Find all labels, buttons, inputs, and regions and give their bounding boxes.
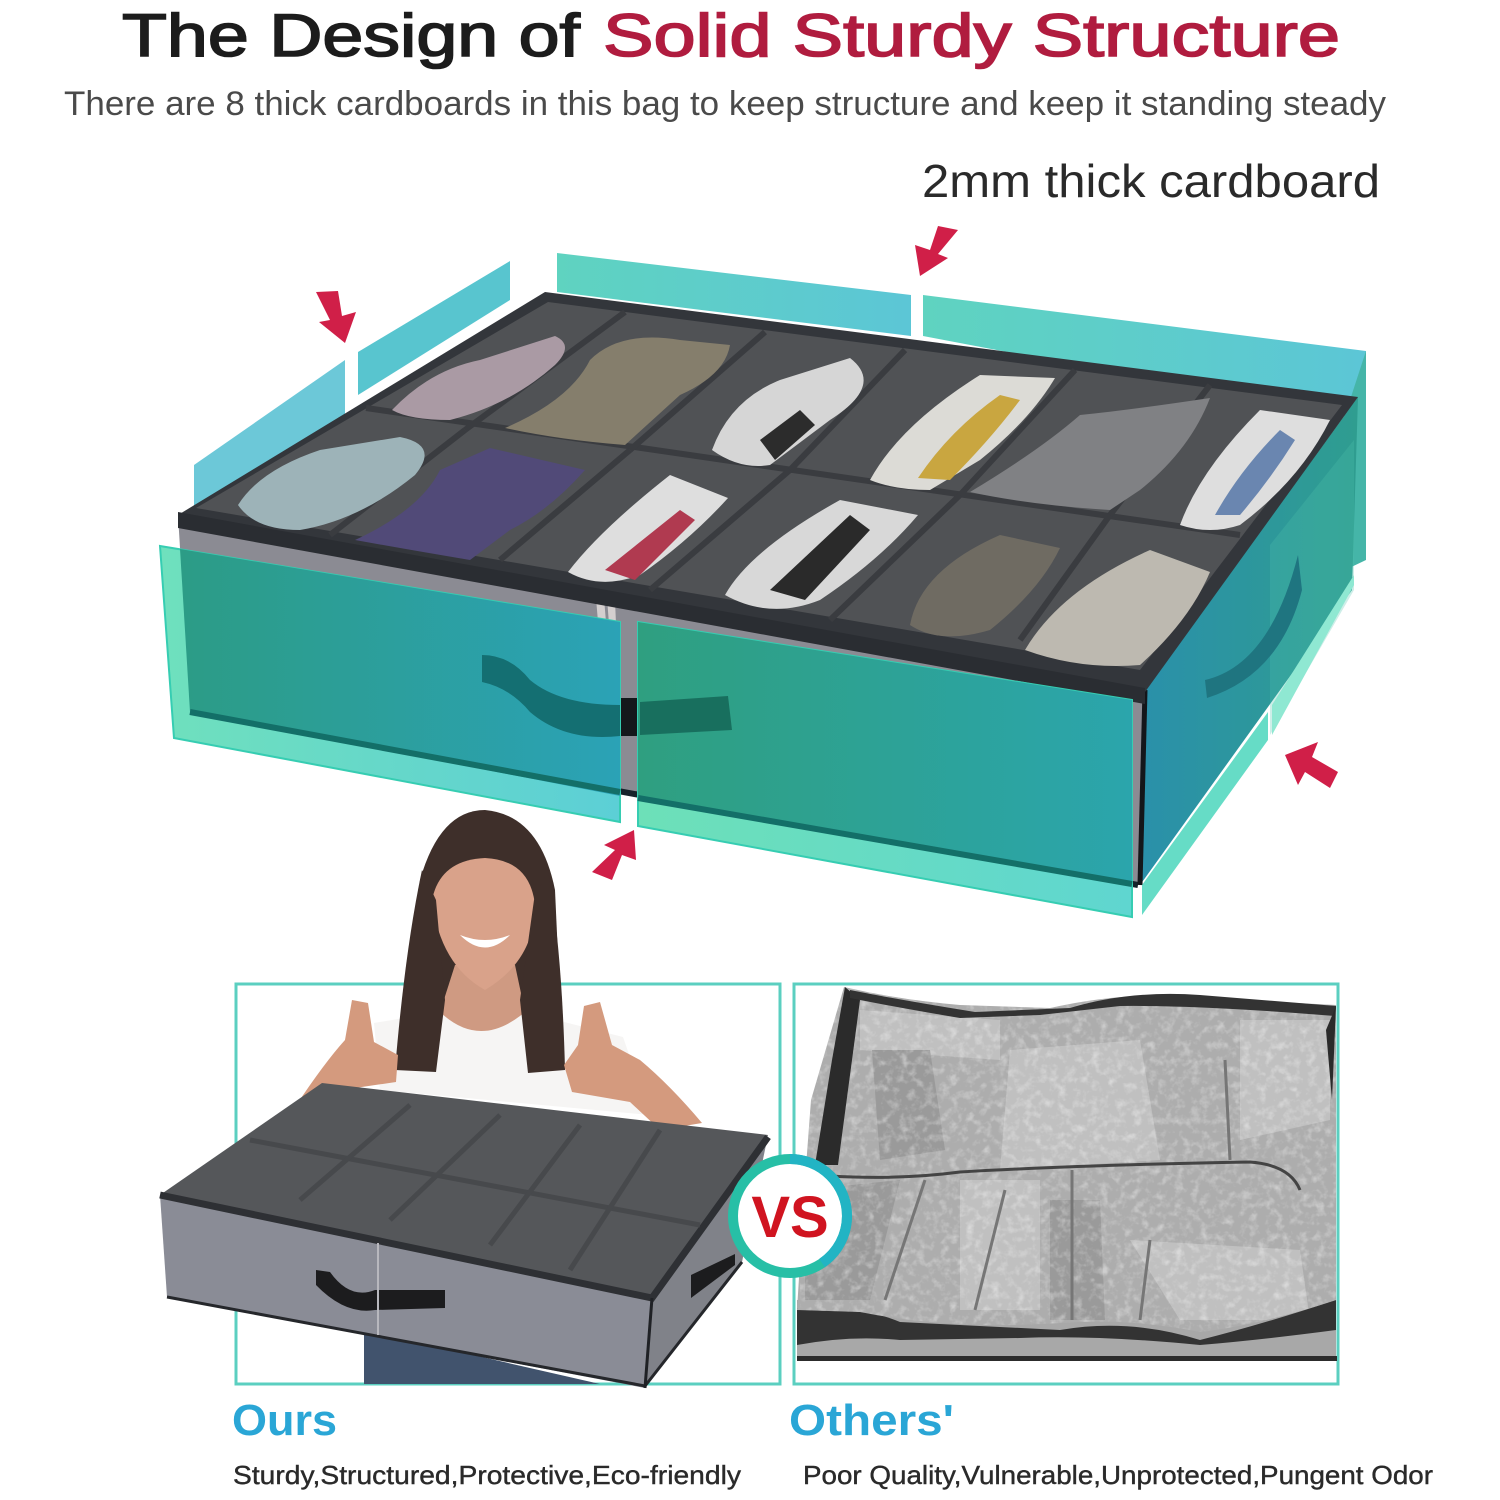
bag front: [178, 515, 1145, 885]
compartment dividers: [330, 312, 1240, 640]
neck: [440, 965, 525, 1031]
bag top window: [196, 302, 1342, 670]
right front panel over bag: [638, 622, 1132, 884]
subtitle: There are 8 thick cardboards in this bag to keep structure and keep it standing steady: [64, 85, 1386, 123]
small bag closed: [160, 1083, 768, 1388]
side panel lower strip: [1272, 575, 1354, 735]
smile: [460, 935, 510, 948]
VS badge: [733, 1159, 847, 1273]
front cardboard panels: [160, 440, 1354, 917]
cardboard label: 2mm thick cardboard: [922, 155, 1380, 207]
speckle: [800, 987, 1336, 1332]
ours caption: Sturdy,Structured,Protective,Eco-friendly: [233, 1460, 741, 1490]
bag top frame: [178, 292, 1358, 692]
arrow: front: [592, 830, 636, 880]
left hair strand: [395, 870, 445, 1072]
front: [160, 1195, 652, 1388]
others caption: Poor Quality,Vulnerable,Unprotected,Pungent Odor: [803, 1460, 1433, 1490]
left front panel outside edge: [160, 546, 620, 822]
zipper pulls: [596, 598, 616, 624]
arrow: right: [1285, 742, 1338, 788]
zipper line: [377, 1243, 379, 1335]
right dark edge: [1326, 1006, 1336, 1100]
top: [160, 1083, 768, 1298]
handle: [316, 1270, 445, 1311]
left bottom shade: [190, 712, 620, 792]
plastic body: [797, 987, 1336, 1332]
arrow: back right: [915, 226, 958, 276]
left dark edge: [815, 987, 860, 1165]
face: [432, 858, 535, 990]
faint dividers: [250, 1105, 700, 1270]
vertical seams: [885, 1060, 1230, 1320]
title: The Design of: [122, 2, 580, 69]
photo: woman: [295, 810, 702, 1384]
side handle: [1205, 555, 1302, 698]
others heading: Others': [789, 1396, 954, 1445]
shoes back row: [392, 336, 565, 420]
back cardboard panels: [194, 253, 1366, 570]
rim: [160, 1137, 768, 1298]
handle behind gap: [618, 698, 640, 736]
storage bag with shoes: [178, 292, 1358, 885]
back hair: [410, 810, 560, 1000]
jeans: [364, 1330, 600, 1384]
bottom edge: [167, 1262, 742, 1386]
ours heading: Ours: [232, 1396, 337, 1445]
bottom line: [797, 1356, 1337, 1361]
bag bottom edge: [190, 712, 1138, 885]
dark band: [797, 1300, 1336, 1345]
panel: ours: [236, 984, 780, 1384]
right corner edge: [1140, 690, 1145, 885]
side: [645, 1135, 768, 1388]
near corner: [645, 1298, 652, 1388]
left arm and thumb: [295, 1000, 398, 1112]
arrow: back left: [316, 291, 356, 343]
VS badge: VS: [751, 1185, 829, 1250]
darker patches: [805, 1050, 1105, 1320]
base strip: [797, 1290, 1336, 1360]
right bottom shade: [638, 798, 1132, 884]
shoes front row: [238, 437, 425, 530]
top: [374, 1012, 650, 1115]
left front panel over bag: [180, 549, 620, 796]
bag right side: [1140, 397, 1358, 885]
right arm and thumb: [564, 1002, 702, 1130]
front handle: [482, 655, 620, 737]
lighter patches: [860, 1010, 1330, 1320]
title accent: Solid Sturdy Structure: [603, 2, 1340, 69]
bag rim: [178, 512, 1145, 704]
horizontal seam: [830, 1162, 1300, 1190]
top dark edge: [850, 990, 1336, 1018]
panel: others: [794, 984, 1338, 1384]
right hair strand: [520, 870, 565, 1073]
photo: plastic bag: [797, 987, 1337, 1361]
right front panel outside edge: [638, 622, 1132, 917]
side panel upper: [1270, 440, 1354, 735]
side handle: [691, 1254, 735, 1298]
